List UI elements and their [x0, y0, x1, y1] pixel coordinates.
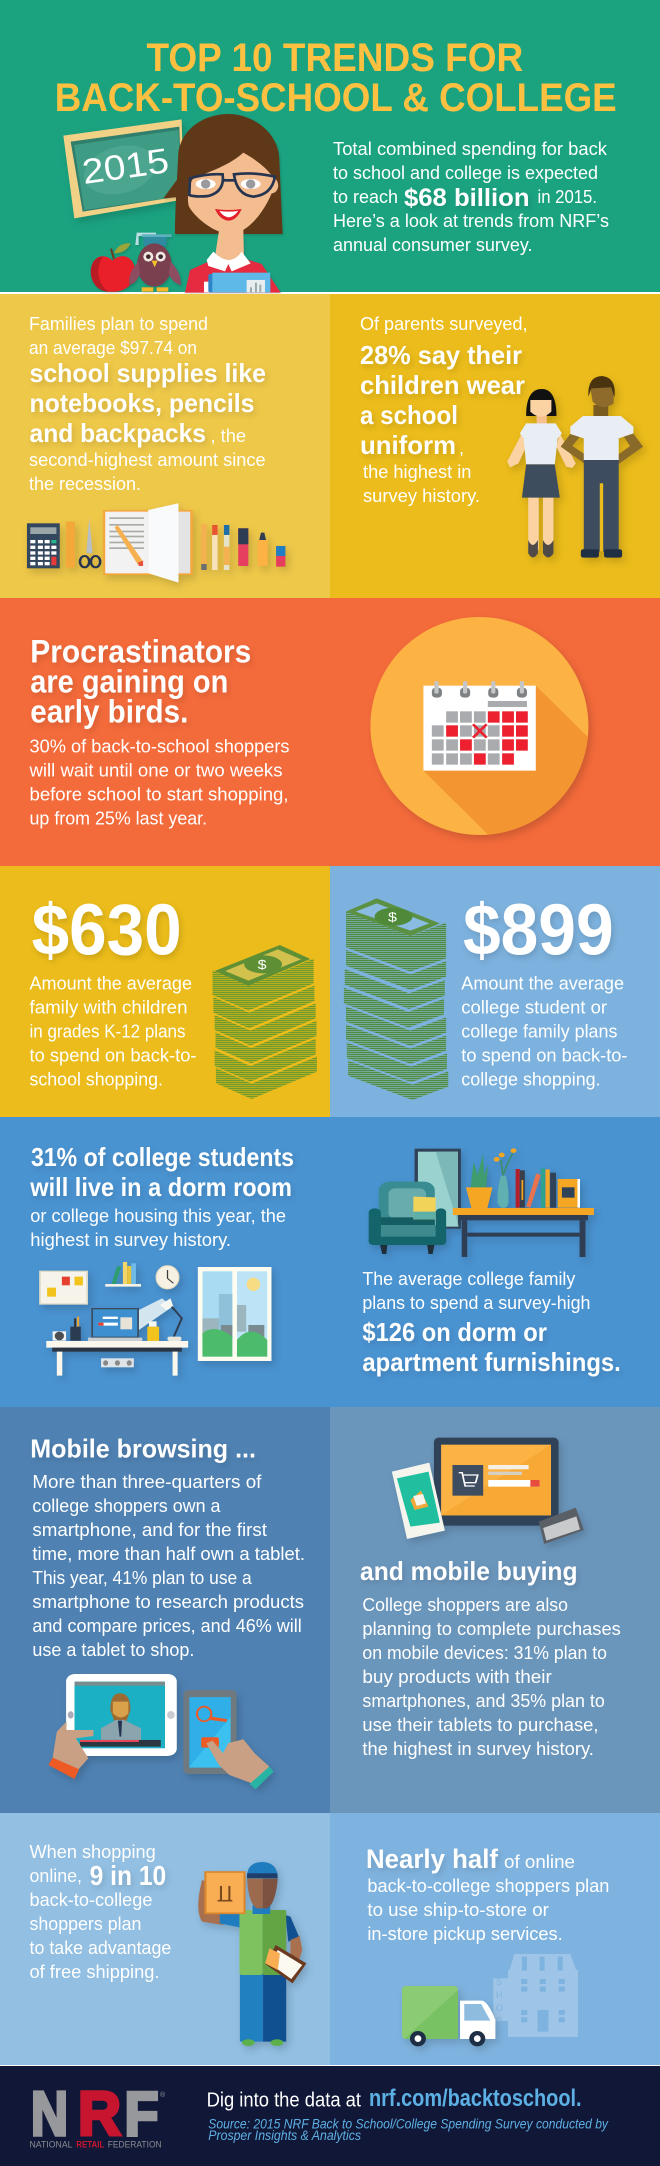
- call to action: [207, 2085, 582, 2112]
- figure: $630: $630: [32, 890, 182, 970]
- panel: mobile buying: [330, 1407, 660, 1813]
- shop sign: [496, 1977, 503, 2026]
- $630 description: to spend on back-to-: [30, 1045, 196, 1065]
- uniform text: uniform: [360, 430, 456, 460]
- icon: calendar in circle: [370, 617, 598, 862]
- mobile browsing text: time, more than half own a tablet.: [32, 1544, 305, 1564]
- icon: apple: [91, 243, 135, 292]
- $899 description: college shopping.: [461, 1069, 601, 1089]
- procrastinators text: before school to start shopping,: [30, 784, 288, 804]
- icon: store: [493, 1954, 578, 2037]
- $899 description: college student or: [461, 997, 607, 1017]
- icon: two students in uniform: [507, 376, 643, 558]
- panel: school uniform: [330, 294, 660, 598]
- NRF logo: ®: [160, 2091, 166, 2099]
- uniform text: Of parents surveyed,: [360, 314, 528, 334]
- icon: tablet, phone and card: [392, 1438, 584, 1544]
- icon: delivery truck: [402, 1986, 495, 2046]
- icon: teacher: [163, 114, 283, 293]
- icon: delivery person: [198, 1862, 306, 2046]
- $899 description: [461, 973, 628, 1089]
- furnishings text: apartment furnishings.: [362, 1347, 621, 1377]
- boy: [561, 376, 643, 558]
- figure: $899: $899: [463, 890, 614, 970]
- NRF logo: F: [124, 2080, 158, 2149]
- dorm text: highest in survey history.: [30, 1230, 231, 1250]
- icon: money stack small: $: [258, 958, 266, 973]
- school supplies text: second-highest amount since: [29, 450, 266, 470]
- shop sign: O: [496, 2003, 503, 2013]
- free shipping text: 9 in 10: [90, 1860, 166, 1891]
- mobile buying text: on mobile devices: 31% plan to: [362, 1643, 607, 1663]
- intro text: annual consumer survey.: [333, 235, 532, 255]
- mobile buying heading: and mobile buying: [360, 1556, 578, 1586]
- school supplies text: notebooks, pencils: [30, 388, 254, 418]
- dorm heading: [29, 1142, 294, 1202]
- NRF logo: N: [31, 2080, 68, 2149]
- panel: dorm: [0, 1117, 660, 1407]
- free shipping text: back-to-college: [30, 1890, 152, 1910]
- shop sign: H: [496, 1990, 502, 2000]
- uniform text: [360, 314, 528, 506]
- source: Source: 2015 NRF Back to School/College Spending Survey conducted by: [208, 2116, 609, 2131]
- $899 description: Amount the average: [461, 973, 624, 993]
- ship-to-store text: Nearly half: [366, 1844, 499, 1874]
- ship-to-store text: back-to-college shoppers plan: [367, 1876, 609, 1896]
- panel: footer: [0, 2066, 660, 2166]
- mobile buying text: buy products with their: [362, 1667, 552, 1687]
- mobile buying text: planning to complete purchases: [362, 1619, 621, 1639]
- $630 description: [30, 973, 196, 1089]
- call to action: Dig into the data at: [207, 2090, 361, 2112]
- school supplies text: and backpacks: [30, 418, 206, 448]
- icon: tablet and phone with hands: [48, 1674, 274, 1789]
- panel: $630 K-12 spending: [0, 866, 330, 1117]
- shop sign: S: [496, 1977, 502, 1987]
- furnishings text: [362, 1269, 621, 1377]
- panel: school supplies: [0, 294, 330, 598]
- panel: mobile browsing: [0, 1407, 330, 1813]
- icon: chalkboard 2015: 2015: [80, 141, 171, 192]
- mobile browsing heading: Mobile browsing ...: [30, 1433, 256, 1463]
- procrastinators heading: are gaining on: [30, 664, 228, 700]
- intro text: [333, 139, 609, 255]
- procrastinators heading: Procrastinators: [30, 634, 251, 670]
- panel: header: [0, 0, 660, 293]
- dorm text: or college housing this year, the: [30, 1206, 286, 1226]
- school supplies text: [29, 314, 266, 494]
- school supplies text: Families plan to spend: [29, 314, 208, 334]
- intro text: in 2015.: [538, 187, 597, 207]
- $630 description: in grades K-12 plans: [30, 1021, 186, 1041]
- uniform text: a school: [360, 400, 458, 430]
- dorm heading: will live in a dorm room: [29, 1172, 292, 1202]
- uniform text: children wear: [360, 370, 525, 400]
- panel: free shipping: [0, 1813, 330, 2065]
- ship-to-store text: [366, 1844, 609, 1944]
- mobile browsing text: use a tablet to shop.: [32, 1640, 194, 1660]
- uniform text: ,: [459, 438, 464, 458]
- intro text: to reach: [333, 187, 398, 207]
- icon: owl: [129, 233, 181, 292]
- icon: money stack tall: $: [388, 911, 397, 925]
- uniform text: survey history.: [363, 486, 480, 506]
- shop sign: P: [496, 2016, 502, 2026]
- girl: [507, 389, 576, 557]
- icon: dorm desk and window: [40, 1262, 271, 1376]
- intro text: Here’s a look at trends from NRF’s: [333, 211, 609, 231]
- uniform text: 28% say their: [360, 340, 522, 370]
- uniform text: the highest in: [363, 462, 471, 482]
- NRF logo: [30, 2080, 166, 2150]
- icon: money stack small: [213, 945, 317, 1099]
- $630 description: family with children: [30, 997, 188, 1017]
- $899 description: to spend on back-to-: [461, 1045, 628, 1065]
- icon: money stack tall: [344, 898, 448, 1100]
- panel: ship-to-store: [330, 1813, 660, 2065]
- free shipping text: to take advantage: [30, 1938, 171, 1958]
- $630 description: school shopping.: [30, 1069, 163, 1089]
- procrastinators text: 30% of back-to-school shoppers: [30, 736, 290, 756]
- school supplies text: the recession.: [29, 474, 141, 494]
- free shipping text: online,: [30, 1866, 82, 1886]
- furnishings text: plans to spend a survey-high: [362, 1293, 590, 1313]
- mobile browsing text: smartphone to research products: [32, 1592, 304, 1612]
- school supplies text: an average $97.74 on: [29, 338, 197, 358]
- mobile browsing text: More than three-quarters of: [32, 1472, 262, 1492]
- title: BACK-TO-SCHOOL & COLLEGE: [55, 76, 617, 120]
- ship-to-store text: in-store pickup services.: [367, 1924, 563, 1944]
- dorm text: [30, 1206, 286, 1250]
- icon: chalkboard 2015: [63, 119, 184, 218]
- furnishings text: $126 on dorm or: [362, 1317, 547, 1347]
- mobile browsing text: and compare prices, and 46% will: [32, 1616, 302, 1636]
- procrastinators text: up from 25% last year.: [30, 808, 207, 828]
- intro text: to school and college is expected: [333, 163, 598, 183]
- procrastinators text: [28, 736, 290, 828]
- source: Prosper Insights & Analytics: [208, 2128, 361, 2143]
- mobile buying text: College shoppers are also: [362, 1595, 568, 1615]
- mobile browsing text: This year, 41% plan to use a: [32, 1568, 253, 1588]
- furnishings text: The average college family: [362, 1269, 575, 1289]
- free shipping text: [30, 1842, 171, 1982]
- NRF logo: RETAIL: [76, 2139, 105, 2150]
- school supplies text: school supplies like: [30, 358, 266, 388]
- free shipping text: shoppers plan: [30, 1914, 141, 1934]
- $630 description: Amount the average: [30, 973, 192, 993]
- free shipping text: of free shipping.: [30, 1962, 160, 1982]
- intro text: $68 billion: [404, 184, 530, 212]
- title: TOP 10 TRENDS FOR: [146, 36, 523, 80]
- mobile browsing text: [32, 1472, 305, 1660]
- icon: chair and table: [369, 1148, 594, 1257]
- procrastinators heading: early birds.: [30, 694, 188, 730]
- NRF logo: NATIONAL: [30, 2139, 72, 2150]
- $899 description: college family plans: [461, 1021, 617, 1041]
- free shipping text: When shopping: [30, 1842, 156, 1862]
- mobile buying text: use their tablets to purchase,: [362, 1715, 598, 1735]
- school supplies text: , the: [210, 426, 246, 446]
- mobile buying text: the highest in survey history.: [362, 1739, 594, 1759]
- procrastinators heading: [30, 634, 251, 730]
- NRF logo: R: [78, 2080, 121, 2149]
- mobile browsing text: college shoppers own a: [32, 1496, 221, 1516]
- mobile buying text: [362, 1595, 621, 1759]
- title: [55, 36, 617, 120]
- mobile buying text: smartphones, and 35% plan to: [362, 1691, 605, 1711]
- ship-to-store text: to use ship-to-store or: [367, 1900, 549, 1920]
- panel: procrastinators: [0, 598, 660, 866]
- panel: $899 college spending: [330, 866, 660, 1117]
- NRF logo: FEDERATION: [108, 2139, 162, 2150]
- mobile browsing text: smartphone, and for the first: [32, 1520, 267, 1540]
- dorm heading: 31% of college students: [31, 1142, 294, 1172]
- intro text: Total combined spending for back: [333, 139, 608, 159]
- source: [208, 2116, 609, 2143]
- ship-to-store text: of online: [504, 1852, 575, 1872]
- call to action: nrf.com/backtoschool.: [369, 2085, 582, 2112]
- procrastinators text: will wait until one or two weeks: [28, 760, 283, 780]
- icon: school supplies: [27, 503, 285, 583]
